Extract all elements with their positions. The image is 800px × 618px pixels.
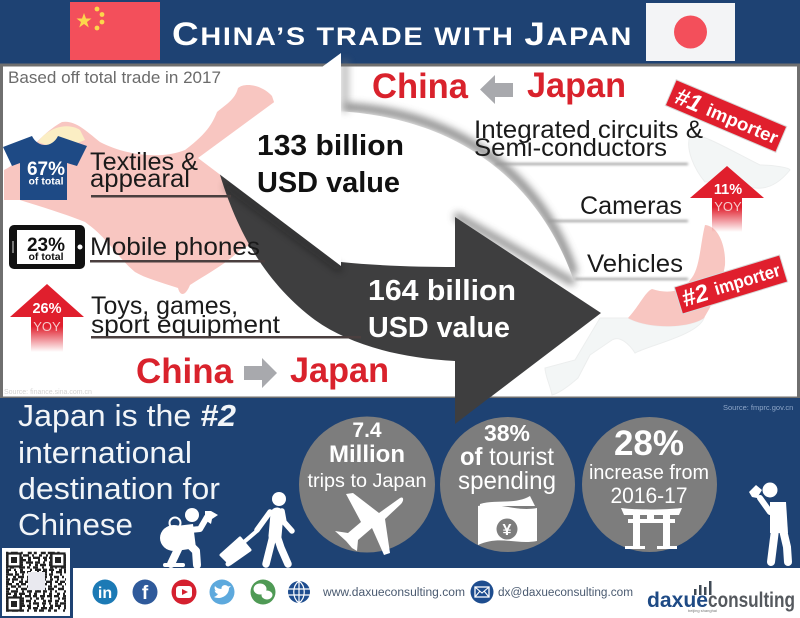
heading: China to Japan: China bbox=[136, 352, 234, 391]
label: mobile phones: Mobile phones bbox=[90, 233, 260, 261]
icon: Japan flag bbox=[646, 3, 735, 61]
heading: China from Japan: China bbox=[372, 67, 469, 106]
icon: arrow 26% YOY: 26% bbox=[32, 301, 62, 317]
source: fmprc: Source: fmprc.gov.cn bbox=[723, 403, 793, 412]
label: integrated circuits: Semi-conductors bbox=[474, 134, 667, 162]
icon: facebook bbox=[132, 580, 158, 604]
label: 133 billion: 133 billion bbox=[257, 130, 404, 162]
panel: trade bbox=[2, 53, 798, 424]
label: integrated circuits bbox=[474, 116, 703, 165]
dark arrow overlap bbox=[455, 398, 489, 424]
circle: 38% tourist spending: spending bbox=[458, 467, 556, 495]
icon: linkedin bbox=[92, 580, 118, 604]
icon: arrow 11% YOY: 11% bbox=[714, 182, 742, 198]
label: textiles: Textiles & bbox=[90, 148, 198, 176]
label: toys bbox=[91, 292, 361, 339]
icon: QR code bbox=[2, 548, 70, 616]
circle: 28% increase: increase from bbox=[589, 462, 709, 484]
logo: daxue consulting: daxue bbox=[647, 589, 708, 612]
badge: #1 importer: #1 bbox=[671, 83, 706, 118]
icon: youtube bbox=[172, 580, 196, 604]
dark arrow shadow on white shaft bbox=[455, 215, 574, 283]
icon: arrow 26% YOY bbox=[10, 284, 84, 352]
circle: 7.4 million trips bbox=[299, 416, 435, 555]
icon: t-shirt 67% of total bbox=[3, 136, 87, 200]
label: cameras: Cameras bbox=[580, 192, 682, 220]
circle: 38% tourist spending: 38% bbox=[484, 420, 530, 446]
title: CHINA’S TRADE WITH JAPAN bbox=[172, 16, 633, 52]
icon: phone 23% of total: 23% bbox=[27, 235, 65, 256]
heading: China from Japan: Japan bbox=[527, 66, 626, 105]
circle: 38% tourist spending bbox=[440, 417, 575, 552]
text: Japan is the #2: Chinese bbox=[18, 507, 133, 542]
label: USD value: USD value bbox=[368, 312, 510, 344]
text: Japan is the #2: international bbox=[18, 435, 192, 470]
footer band bbox=[2, 548, 800, 618]
header band bbox=[0, 0, 800, 66]
icon: arrow 11% YOY: YOY bbox=[714, 199, 742, 214]
icon: arrow 11% YOY bbox=[690, 166, 764, 232]
arrow: China to Japan bbox=[218, 168, 601, 424]
text: email address: dx@daxueconsulting.com bbox=[498, 587, 633, 599]
icon: traveller with suitcase bbox=[221, 492, 292, 566]
icon: China flag bbox=[70, 2, 160, 60]
text: Japan is the #2 bbox=[18, 398, 236, 542]
icon: email bbox=[470, 580, 494, 604]
label: textiles bbox=[90, 148, 231, 198]
arrow shaft shadow bbox=[345, 107, 574, 274]
icon: arrow 26% YOY: YOY bbox=[33, 319, 61, 334]
label: textiles: appearal bbox=[90, 165, 190, 193]
circle: 7.4 million trips: Million bbox=[329, 441, 405, 468]
map: China bbox=[4, 85, 280, 294]
label: integrated circuits: Integrated circuits & bbox=[474, 116, 703, 144]
icon: facebook: f bbox=[142, 583, 149, 604]
icon: twitter bbox=[210, 580, 234, 604]
logo: daxue consulting bbox=[647, 581, 795, 613]
icon: phone 23% of total bbox=[9, 225, 85, 269]
icon: yen banknotes: ¥ bbox=[503, 522, 512, 539]
arrow shaft: Japan to China bbox=[335, 111, 574, 281]
label: 164 billion: 164 billion bbox=[368, 275, 516, 307]
circle: 28% increase: 2016-17 bbox=[610, 483, 688, 508]
icon: kneeling photographer bbox=[160, 508, 218, 565]
icon: globe bbox=[288, 581, 310, 603]
badge: #2 importer: importer bbox=[712, 260, 783, 299]
icon: standing photographer bbox=[749, 482, 788, 562]
map: Japan bbox=[545, 135, 790, 395]
circle: 38% tourist spending: of tourist bbox=[460, 443, 554, 471]
label: toys: sport equipment bbox=[91, 311, 280, 339]
logo: daxue consulting: beijing shanghai bbox=[688, 608, 717, 613]
label: USD value: USD value bbox=[257, 167, 400, 199]
circle: 7.4 million trips: 7.4 bbox=[352, 419, 382, 442]
icon: torii gate bbox=[621, 508, 682, 549]
circle: 28% increase bbox=[582, 417, 717, 552]
icon: linkedin: in bbox=[98, 585, 112, 602]
text: website: www.daxueconsulting.com bbox=[322, 587, 465, 599]
text: Japan is the #2: Japan is the #2 bbox=[18, 398, 236, 433]
heading: China from Japan bbox=[372, 66, 626, 106]
arrow head: Japan to China bbox=[198, 53, 341, 266]
icon: wechat bbox=[250, 580, 276, 604]
source: sina: Source: finance.sina.com.cn bbox=[4, 389, 92, 396]
label: cameras bbox=[548, 192, 688, 222]
label: toys: Toys, games, bbox=[91, 292, 238, 320]
arrow head shadow on dark arrow bbox=[225, 185, 341, 270]
badge: #1 importer: importer bbox=[703, 100, 781, 148]
badge: #1 importer bbox=[665, 80, 787, 152]
circle: 28% increase: 28% bbox=[614, 424, 684, 463]
icon: t-shirt 67% of total: of total bbox=[28, 176, 64, 188]
icon: plane bbox=[335, 493, 403, 555]
text: Japan is the #2: destination for bbox=[18, 471, 220, 506]
arrow head back-edge shadow bbox=[342, 60, 348, 112]
circle: 7.4 million trips: trips to Japan bbox=[308, 471, 426, 492]
panel: tourism bbox=[0, 398, 800, 568]
badge: #2 importer bbox=[674, 255, 788, 314]
icon: t-shirt 67% of total: 67% bbox=[27, 159, 65, 180]
heading: China to Japan: Japan bbox=[290, 351, 389, 390]
note: based off total trade: Based off total trade in 2017 bbox=[8, 68, 221, 87]
label: vehicles: Vehicles bbox=[587, 250, 683, 278]
icon: phone 23% of total: of total bbox=[28, 251, 64, 263]
badge: #2 importer: #2 bbox=[678, 279, 712, 313]
heading: China to Japan bbox=[136, 351, 389, 391]
